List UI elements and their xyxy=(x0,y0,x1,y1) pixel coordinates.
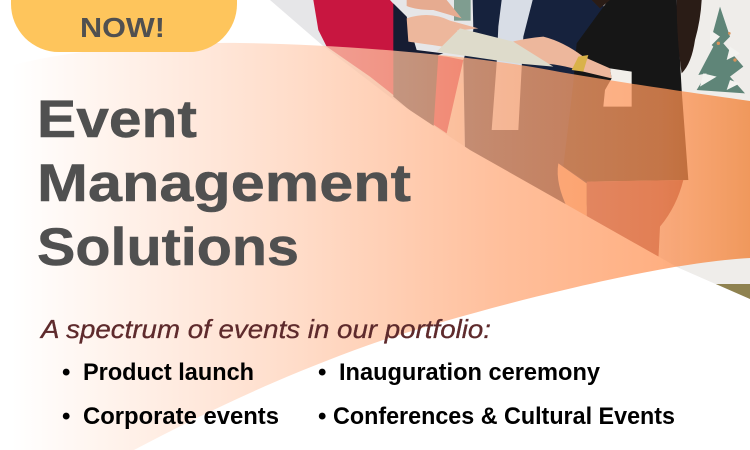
list item: Corporate events: • xyxy=(62,403,70,430)
photo detail: black jacket xyxy=(563,0,688,182)
event list xyxy=(62,359,675,430)
badge: NOW! xyxy=(11,0,237,52)
title: Event Management Solutions xyxy=(37,90,411,277)
badge: NOW!: NOW! xyxy=(80,12,165,43)
photo detail: curly hair xyxy=(677,0,702,73)
photo detail: hands xyxy=(407,15,478,47)
photo detail: document xyxy=(437,28,553,67)
title: Event Management Solutions: Event xyxy=(37,90,197,149)
photo detail: watch xyxy=(572,55,588,72)
photo detail: trousers xyxy=(587,180,683,260)
subheading: A spectrum of events in our portfolio: xyxy=(39,314,491,344)
list item: Conferences and Cultural Events: Conferences & Cultural Events xyxy=(333,403,675,430)
photo detail: navy suit xyxy=(463,0,604,205)
title: Event Management Solutions: Solutions xyxy=(37,218,299,277)
photo: business team exchanging a document xyxy=(270,0,750,299)
list item: Conferences and Cultural Events: • xyxy=(318,403,326,430)
list item: Product launch: Product launch xyxy=(83,359,254,386)
list item: Product launch: • xyxy=(62,359,70,386)
list item: Inauguration ceremony: Inauguration ceremony xyxy=(339,359,601,386)
list item: Inauguration ceremony: • xyxy=(318,359,326,386)
photo detail: christmas tree xyxy=(454,0,745,94)
photo detail: striped shirt xyxy=(492,0,533,130)
photo detail: white cuff xyxy=(603,68,632,107)
list item: Corporate events: Corporate events xyxy=(83,403,279,430)
title: Event Management Solutions: Management xyxy=(37,154,411,213)
photo detail: red jacket xyxy=(313,0,463,133)
